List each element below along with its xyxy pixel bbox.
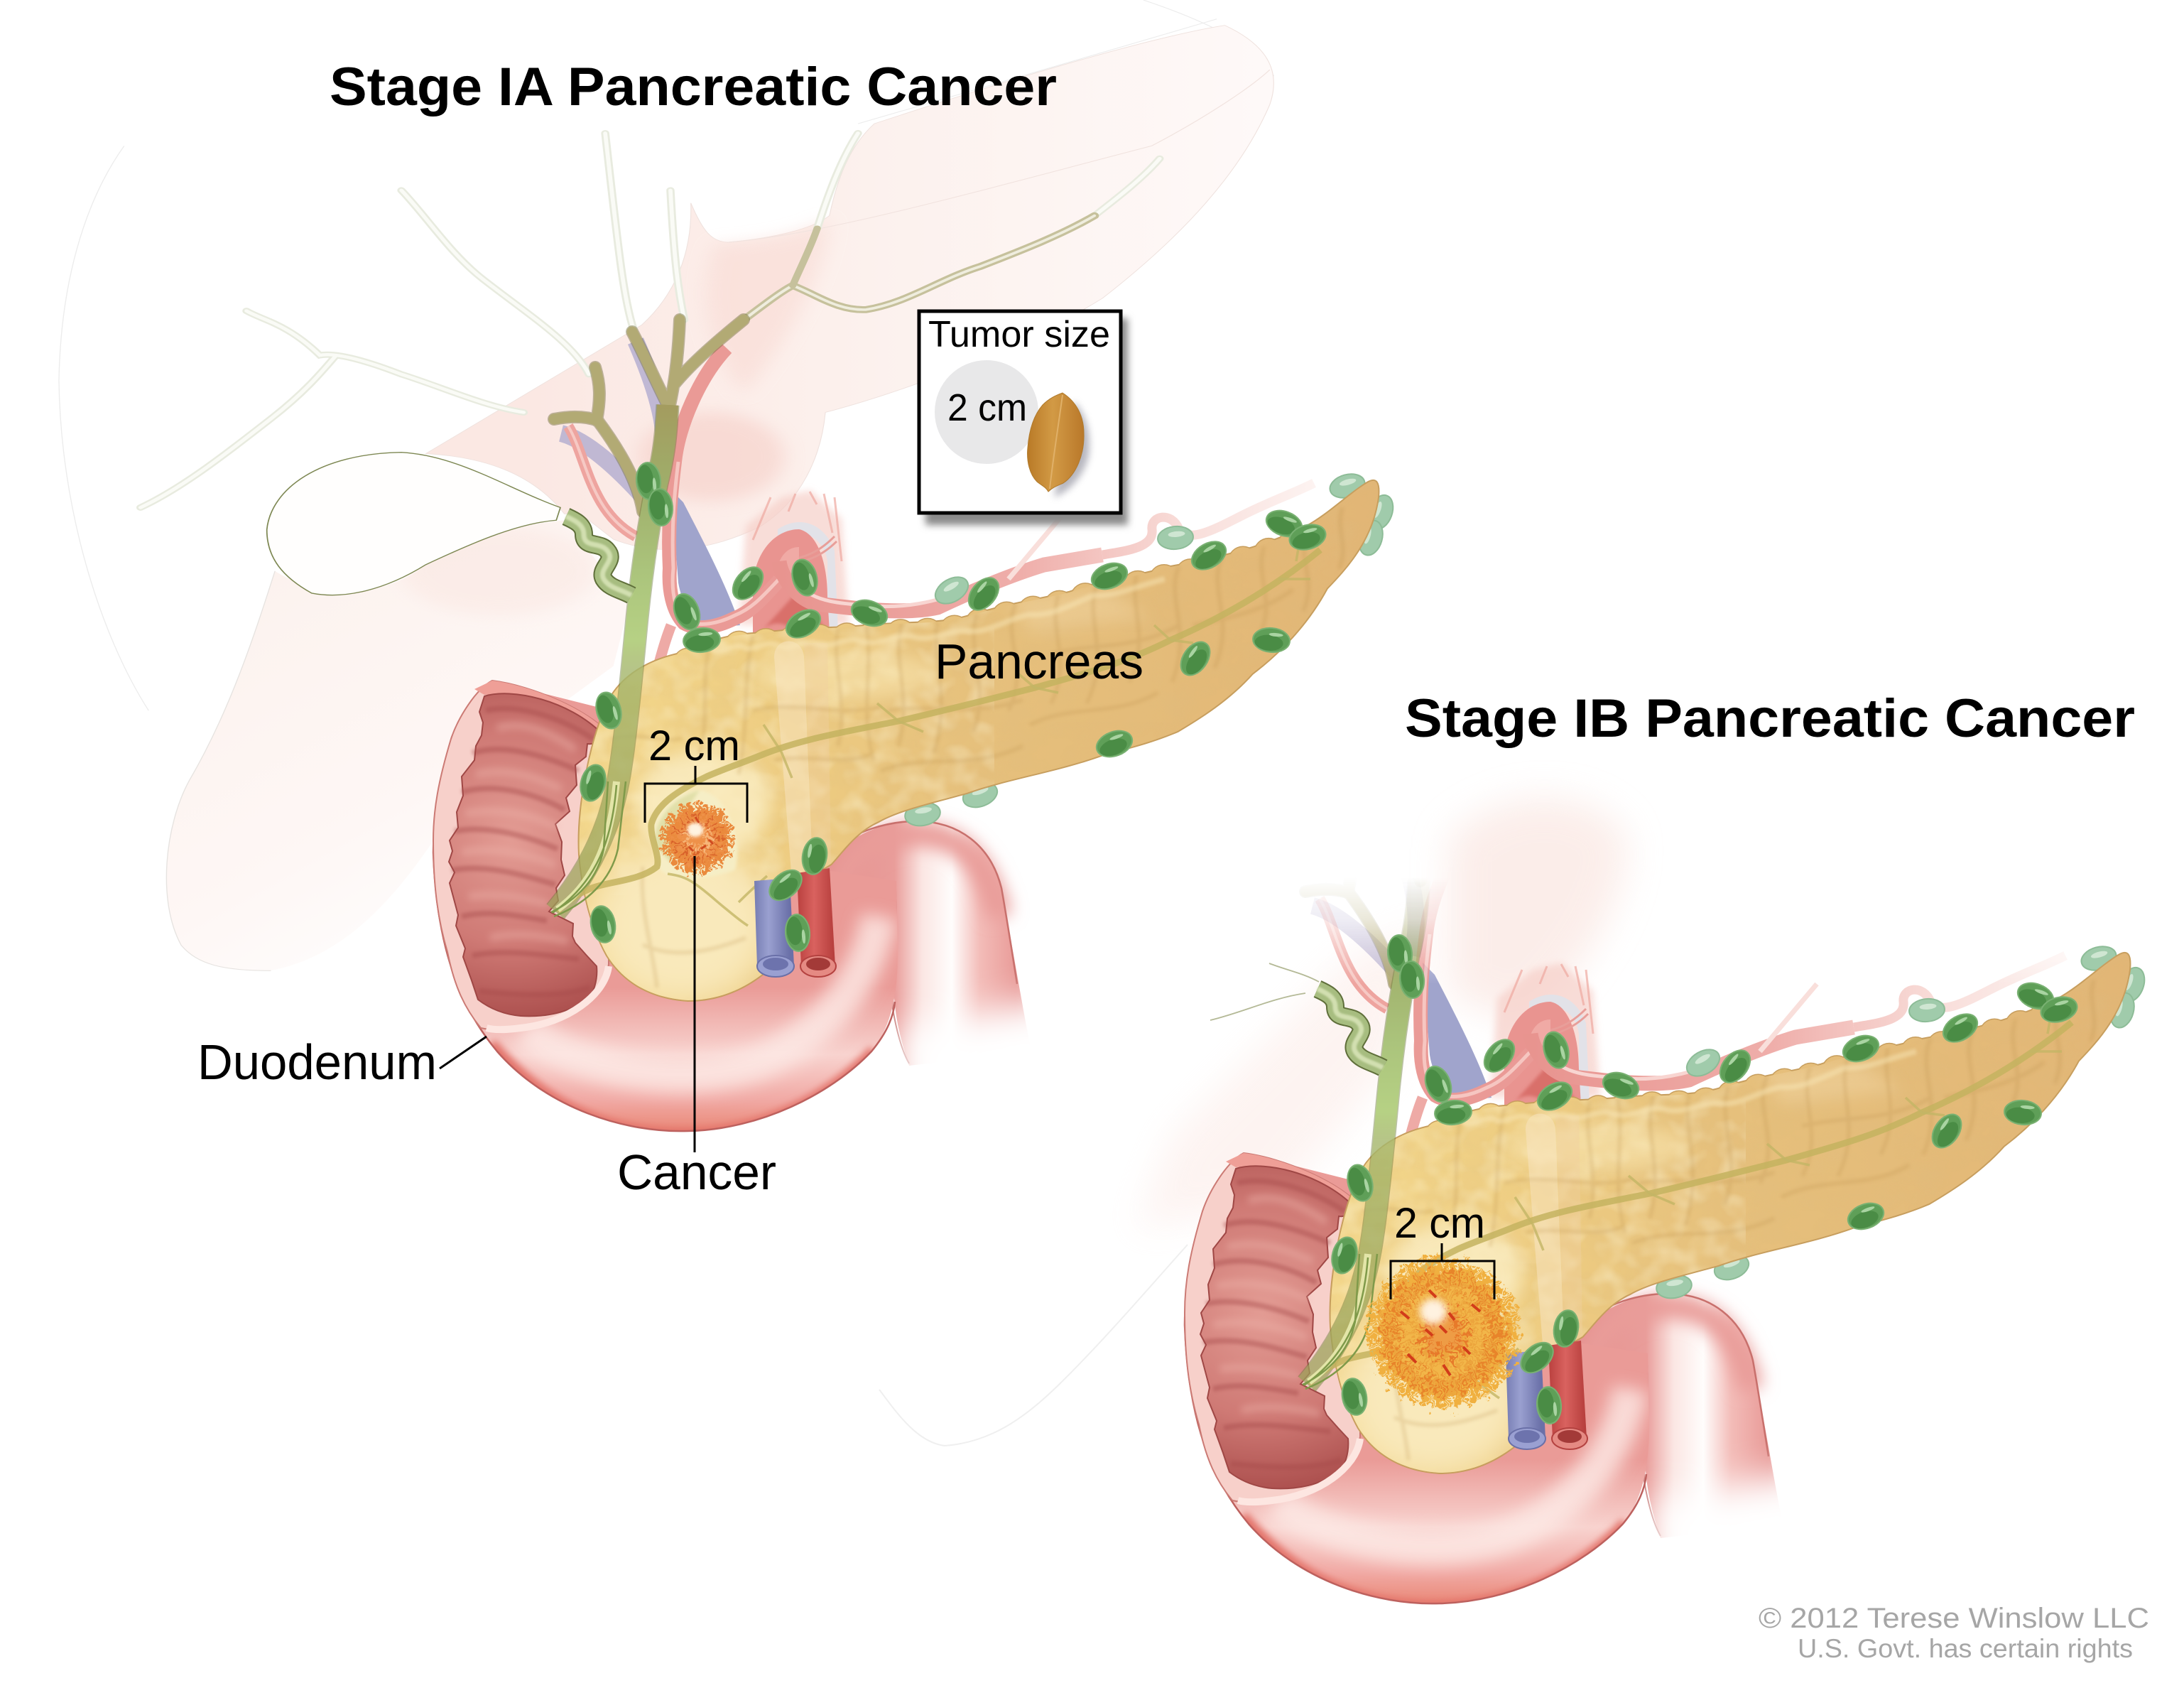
pancreatic duct and cystic duct — [551, 516, 1320, 926]
pancreas-side lobe shading — [401, 526, 597, 615]
faded liver outline — [879, 1245, 1188, 1446]
pale hepatic ducts over liver — [141, 134, 1160, 507]
icon: peanut — [1028, 393, 1084, 492]
inset shadow — [925, 318, 1128, 525]
portal vein — [561, 341, 740, 628]
label: Duodenum: Duodenum — [197, 1034, 437, 1090]
duodenum — [1185, 1153, 1649, 1608]
arteries — [568, 348, 1314, 671]
title: stage IA: Stage IA Pancreatic Cancer — [330, 57, 1057, 117]
opened duodenum interior — [433, 681, 609, 1029]
copyright line 2: U.S. Govt. has certain rights — [1798, 1634, 2133, 1663]
portal vein — [1310, 897, 1492, 1098]
inset heading: Tumor size — [928, 314, 1110, 355]
tumor surrounding tissue — [651, 790, 737, 878]
lymph nodes — [577, 462, 1329, 952]
label: Cancer: Cancer — [617, 1145, 776, 1200]
organ shading — [638, 412, 785, 501]
upper bile ducts — [554, 320, 744, 512]
pink organ body — [426, 26, 1273, 550]
copyright — [1759, 1603, 2149, 1663]
pancreas — [568, 469, 1392, 1009]
aorta — [1490, 963, 1600, 1108]
common bile duct — [555, 405, 668, 911]
olive right hepatic branch — [744, 216, 1094, 320]
olive branch center — [744, 216, 1094, 320]
bracket: 2 cm stage IB — [1391, 1243, 1494, 1299]
copyright line 1: © 2012 Terese Winslow LLC — [1759, 1603, 2149, 1634]
pale duct outlines — [141, 134, 1160, 507]
gallbladder — [267, 453, 560, 595]
leader: cancer — [693, 856, 696, 1152]
superior mesenteric vessels — [1506, 1341, 1587, 1449]
bracket: 2 cm stage IA — [645, 766, 747, 823]
lymph nodes — [1328, 934, 2080, 1424]
inset: tumor size comparison — [919, 311, 1128, 525]
duodenum — [433, 681, 898, 1135]
aorta — [739, 490, 849, 636]
label: 2 cm stage IA: 2 cm — [648, 722, 740, 769]
icon: peanut shadow — [1054, 401, 1090, 497]
faded liver lower lobe — [1136, 924, 1428, 1229]
olive branch upper — [793, 228, 817, 286]
back lymph nodes — [903, 470, 1398, 828]
jejunum limb — [817, 821, 1080, 1115]
pancreas — [1320, 941, 2144, 1481]
organ upper shading — [706, 219, 830, 394]
organ lobe line — [727, 70, 1270, 242]
cancer tumor stage IA — [668, 808, 727, 868]
pancreatic duct and cystic duct — [1303, 989, 2072, 1398]
liver outer outline — [59, 0, 1273, 710]
2 cm circle — [935, 360, 1038, 464]
2 cm circle label: 2 cm — [947, 386, 1027, 429]
cancer tumor stage IB — [1378, 1267, 1509, 1398]
right lobe edge — [166, 571, 275, 970]
inset box — [919, 311, 1121, 513]
common bile duct — [1307, 877, 1419, 1384]
gallbladder neck outline — [1210, 963, 1319, 1020]
panel: stage IA anatomy context (liver, gallbladder, hepatic ducts) — [59, 0, 1273, 970]
upper bile ducts — [1300, 887, 1398, 990]
superior mesenteric vessels — [754, 868, 836, 977]
jejunum limb — [1568, 1294, 1831, 1588]
label: 2 cm stage IB: 2 cm — [1394, 1199, 1485, 1247]
arteries — [1315, 890, 2067, 1132]
faded organ shading — [1449, 799, 1626, 1023]
label: Pancreas: Pancreas — [935, 634, 1143, 689]
opened duodenum interior — [1185, 1153, 1360, 1502]
right lobe fill — [166, 520, 630, 970]
pale duct centers — [141, 134, 1160, 507]
panel: stage IB anatomy context (faded liver and outline) — [879, 799, 1626, 1446]
title: stage IB: Stage IB Pancreatic Cancer — [1405, 688, 2135, 749]
back lymph nodes — [1655, 943, 2149, 1301]
illustration: stage IA pancreas and duodenum — [433, 320, 1398, 1135]
leader: duodenum — [440, 1037, 487, 1068]
illustration: stage IB pancreas and duodenum — [1185, 792, 2149, 1608]
